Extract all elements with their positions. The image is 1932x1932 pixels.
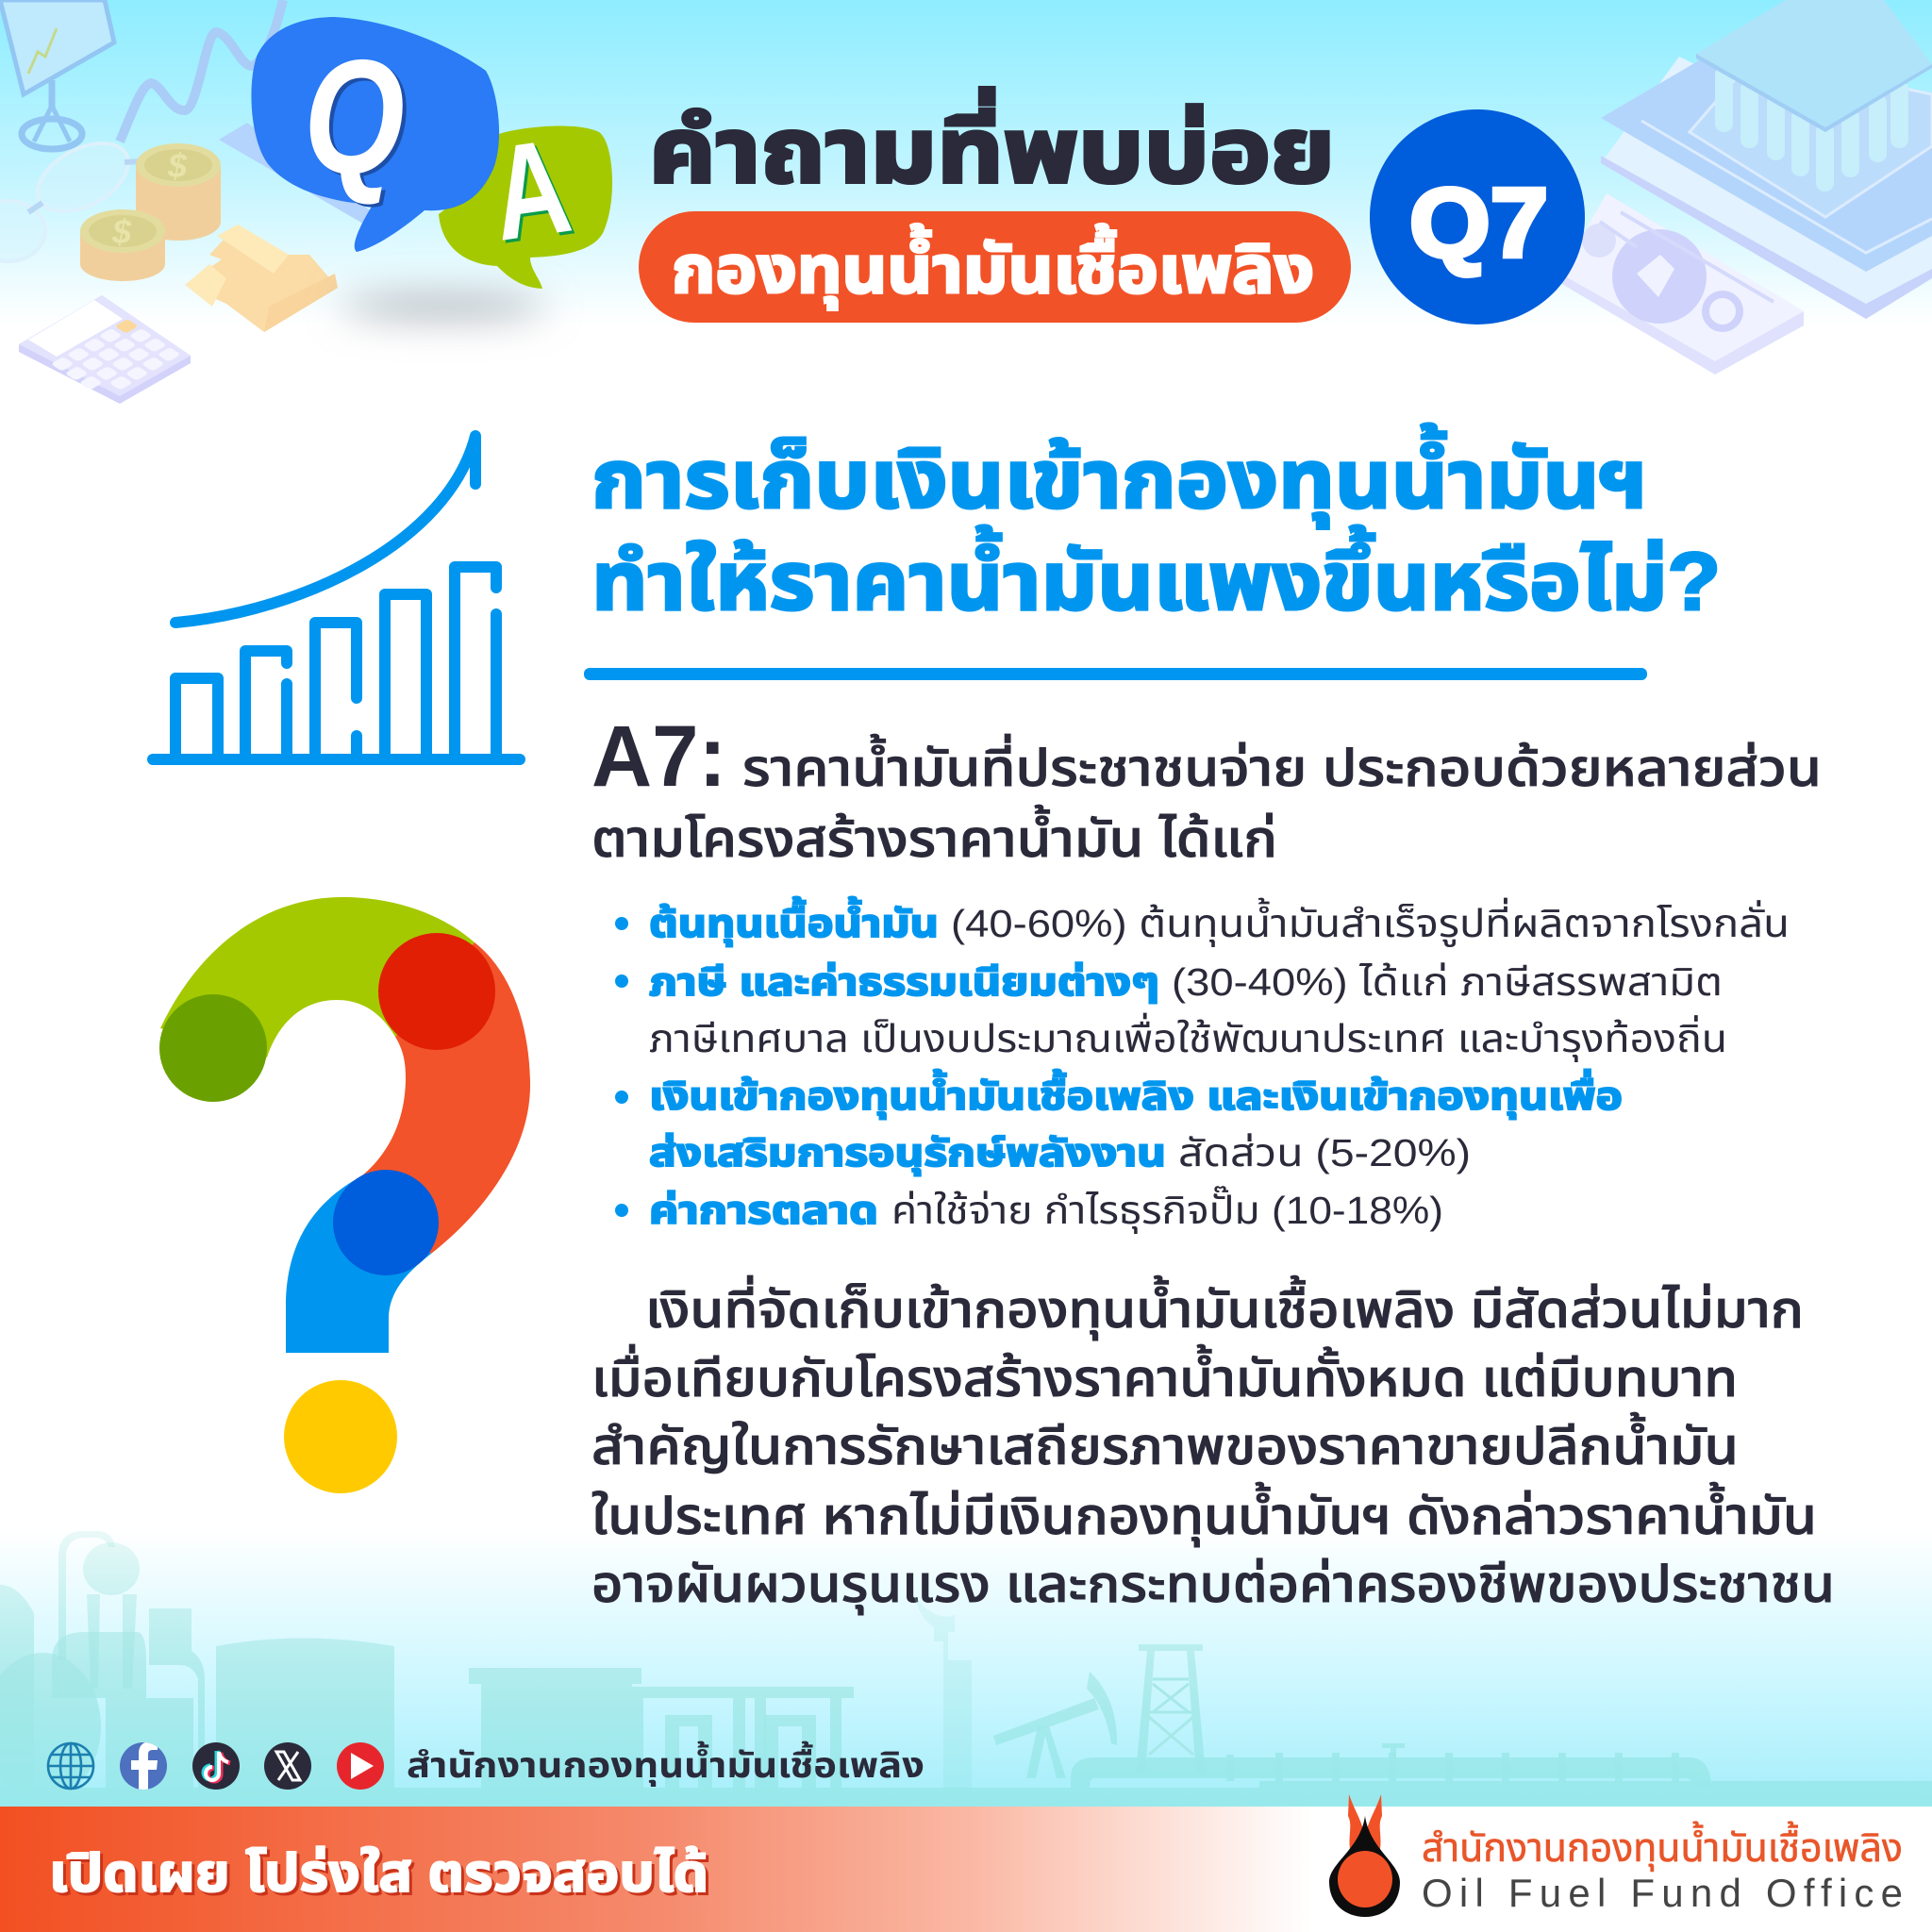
bullet: crude cost: (40-60%) ต้นทุนน้ำมันสำเร็จรูปที่ผลิตจากโรงกลั่น: [951, 897, 1790, 947]
social icons row: [48, 1741, 384, 1791]
bullet: marketing margin: ค่าใช้จ่าย กำไรธุรกิจปั๊ม (10-18%): [891, 1186, 1443, 1234]
explanatory paragraph: เงินที่จัดเก็บเข้ากองทุนน้ำมันเชื้อเพลิง มีสัดส่วนไม่มาก: [645, 1275, 1804, 1341]
icon: glasses: [0, 129, 189, 261]
explanatory paragraph: ในประเทศ หากไม่มีเงินกองทุนน้ำมันฯ ดังกล่าวราคาน้ำมัน: [591, 1482, 1817, 1547]
icon: coin stacks: [80, 143, 221, 281]
icon: YouTube: [337, 1742, 384, 1790]
icon: coin stacks: $: [167, 146, 188, 185]
bullet: fund contributions: เงินเข้ากองทุนน้ำมันเชื้อเพลิง และเงินเข้ากองทุนเพื่อ: [649, 1069, 1623, 1120]
question heading: [591, 423, 1721, 627]
explanatory paragraph: อาจผันผวนรุนแรง และกระทบต่อค่าครองชีพของประชาชน: [591, 1557, 1835, 1615]
icon: Q speech bubble: [251, 17, 499, 252]
footer band: [0, 1807, 1311, 1932]
icon: globe: [48, 1743, 93, 1789]
bullet: taxes and fees: (30-40%) ได้แก่ ภาษีสรรพสามิต: [1172, 960, 1723, 1004]
icon: A speech bubble: A: [486, 113, 581, 272]
icon: A speech bubble: A: [483, 110, 578, 269]
icon: Facebook: [120, 1741, 167, 1791]
social account name: สำนักงานกองทุนน้ำมันเชื้อเพลิง: [407, 1740, 924, 1787]
oil field silhouette: [0, 1644, 1932, 1807]
answer intro: ตามโครงสร้างราคาน้ำมัน ได้แก่: [591, 805, 1277, 868]
bullet: taxes and fees: ภาษีเทศบาล เป็นงบประมาณเพื่อใช้พัฒนาประเทศ และบำรุงท้องถิ่น: [649, 1012, 1727, 1062]
explanatory paragraph: เมื่อเทียบกับโครงสร้างราคาน้ำมันทั้งหมด แต่มีบทบาท: [591, 1344, 1738, 1407]
answer intro: ราคาน้ำมันที่ประชาชนจ่าย ประกอบด้วยหลายส่วน: [742, 734, 1822, 797]
logo text English: Oil Fuel Fund Office: [1422, 1871, 1903, 1915]
icon: coin stacks: $: [111, 212, 132, 251]
icon: banknote: [1560, 193, 1804, 375]
heading underline: [584, 668, 1647, 680]
icon: rising ribbon graph: [120, 0, 283, 142]
bullet: fund contributions: [615, 1069, 1623, 1176]
bullet list: price structure: [615, 896, 1790, 1234]
footer slogan: เปิดเผย โปร่งใส ตรวจสอบได้: [49, 1843, 708, 1903]
icon: flame drop: [1329, 1794, 1400, 1917]
logo text Thai: สำนักงานกองทุนน้ำมันเชื้อเพลิง: [1422, 1821, 1903, 1872]
logo: Oil Fuel Fund Office: [1329, 1794, 1903, 1917]
bubble ground shadow: [340, 295, 547, 318]
icon: gold bars: [185, 225, 338, 332]
bullet: fund contributions: สัดส่วน (5-20%): [1178, 1131, 1471, 1174]
icon: X: [264, 1742, 311, 1790]
subtitle pill: กองทุนน้ำมันเชื้อเพลิง: [672, 224, 1314, 309]
icon: laptop behind bubbles: [219, 123, 373, 226]
icon: bank building: [1601, 0, 1932, 319]
explanatory paragraph: สำคัญในการรักษาเสถียรภาพของราคาขายปลีกน้ำมัน: [591, 1412, 1739, 1475]
icon: calculator: [19, 295, 191, 404]
icon: TikTok: [192, 1742, 240, 1790]
refinery silhouette: [0, 1531, 972, 1807]
icon: Q speech bubble: Q: [308, 29, 408, 211]
bullet: marketing margin: [615, 1186, 1443, 1234]
title: คำถามที่พบบ่อย: [649, 88, 1335, 202]
icon: A speech bubble: [439, 110, 612, 289]
icon: rising bar chart: [153, 436, 520, 759]
footer slogan: เปิดเผย โปร่งใส ตรวจสอบได้: [52, 1846, 711, 1906]
bullet: marketing margin: ค่าการตลาด: [649, 1189, 878, 1232]
question heading: การเก็บเงินเข้ากองทุนน้ำมันฯ: [591, 423, 1647, 528]
Q7 badge: Q7: [1409, 169, 1548, 278]
question heading: ทำให้ราคาน้ำมันแพงขึ้นหรือไม่?: [591, 525, 1721, 627]
icon: colourful question mark: [159, 897, 530, 1493]
bullet: taxes and fees: [615, 960, 1727, 1062]
bullet: fund contributions: ส่งเสริมการอนุรักษ์พลังงาน: [649, 1131, 1166, 1176]
answer intro: A7:: [591, 708, 726, 805]
bullet: crude cost: ต้นทุนเนื้อน้ำมัน: [649, 896, 939, 947]
bullet: taxes and fees: ภาษี และค่าธรรมเนียมต่างๆ: [649, 960, 1159, 1004]
Q7 badge: [1370, 109, 1585, 325]
subtitle pill: [639, 211, 1351, 323]
header illustration: left finance items: [0, 0, 547, 404]
explanatory paragraph: [591, 1275, 1835, 1615]
icon: Q speech bubble: Q: [304, 26, 405, 208]
bullet: crude cost: [615, 896, 1790, 947]
icon: chart easel: [0, 0, 114, 149]
answer intro: [591, 708, 1822, 868]
header illustration: bank and banknote: [1560, 0, 1932, 375]
